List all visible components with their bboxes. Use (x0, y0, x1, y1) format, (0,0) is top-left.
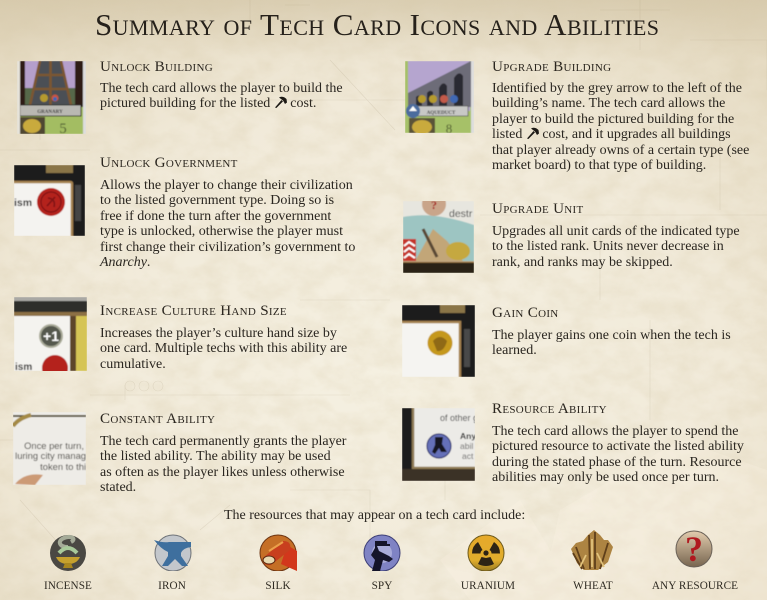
body text: during the stated phase of the turn. Resource (492, 455, 742, 470)
icon: granary card: GRANARY (37, 110, 63, 115)
body text: The player gains one coin when the tech is (492, 328, 731, 343)
body text: listed cost, and it upgrades all buildings (492, 127, 731, 142)
icon: unit card: destr (449, 208, 473, 220)
icon: resource ability card: abil (460, 441, 473, 451)
body text (492, 328, 731, 358)
heading: Unlock Government (100, 155, 238, 171)
icon: silk roll (260, 534, 297, 571)
heading: Upgrade Building (492, 59, 611, 75)
body text: market board) to that type of building. (492, 158, 706, 173)
title: Summary of Tech Card Icons and Abilities (95, 7, 659, 42)
icon: government card (14, 165, 85, 236)
resource: silk (260, 534, 297, 592)
body text: cumulative. (100, 357, 166, 372)
body text: The tech card allows the player to spend the (492, 424, 738, 439)
body text: the listed ability. The ability may be used (100, 449, 331, 464)
label: INCENSE (44, 580, 92, 592)
icon: any resource question mark (676, 530, 712, 568)
body text: learned. (492, 343, 537, 358)
panel: resource ability (402, 401, 744, 485)
resource: incense (44, 534, 92, 592)
body text: rank, and ranks may be skipped. (492, 255, 673, 270)
body text (99, 178, 355, 270)
icon: incense (50, 534, 86, 571)
body text (100, 434, 346, 495)
panel: constant ability (13, 411, 346, 495)
body text (492, 81, 749, 173)
panel: unlock government (14, 155, 355, 270)
heading: Upgrade Unit (492, 201, 584, 217)
label: IRON (158, 580, 186, 592)
body text: player to build the pictured building for the (492, 112, 734, 127)
icon: uranium (468, 534, 504, 571)
body text: The tech card permanently grants the player (100, 434, 346, 449)
body text: Identified by the grey arrow to the left of the (492, 81, 742, 96)
resource: spy (364, 534, 400, 592)
body text: building’s name. The tech card allows the (492, 96, 725, 111)
body text: type is unlocked, otherwise the player must (100, 224, 343, 239)
heading: Resource Ability (492, 401, 607, 417)
icon: coin card (402, 305, 475, 377)
body text: to the listed government type. Doing so is (100, 193, 334, 208)
label: ANY RESOURCE (652, 580, 738, 592)
icon: resource ability card (402, 408, 475, 481)
body text: pictured building for the listed cost. (100, 96, 316, 111)
heading: Increase Culture Hand Size (100, 303, 287, 319)
heading: Unlock Building (100, 59, 213, 75)
icon: culture card: +1 (43, 328, 59, 344)
body text (100, 326, 347, 372)
resource: iron (154, 534, 192, 592)
panel: upgrade building (405, 59, 749, 173)
icon: aqueduct card (405, 61, 474, 133)
panel: increase culture hand size (14, 297, 347, 372)
icon: constant ability card (13, 412, 86, 485)
icon: aqueduct card: AQUEDUCT (427, 111, 456, 116)
body text: Anarchy. (100, 255, 150, 270)
body text: to the listed rank. Units never decrease in (492, 239, 724, 254)
icon: iron anvil (154, 534, 192, 571)
label: SPY (372, 580, 392, 592)
label: URANIUM (461, 580, 515, 592)
icon: constant ability card: Once per turn, (24, 440, 84, 451)
body text: first change their civilization’s government to (100, 240, 355, 255)
body text: abilities may only be used once per turn. (492, 470, 719, 485)
panel: gain coin (402, 305, 731, 377)
body text (492, 224, 740, 270)
body text (492, 424, 744, 485)
body text: Increases the player’s culture hand size by (100, 326, 337, 341)
body text: one card. Multiple techs with this ability are (100, 341, 347, 356)
icon: culture card (14, 297, 87, 371)
label: WHEAT (573, 580, 613, 592)
icon: government card: ism (14, 197, 32, 209)
body text: pictured resource to activate the listed ability (492, 439, 744, 454)
icon: constant ability card: token to thi (40, 461, 86, 472)
resource: any resource (652, 530, 738, 592)
heading: Gain Coin (492, 305, 559, 321)
body text: The tech card allows the player to build the (100, 81, 343, 96)
panel: upgrade unit (403, 201, 740, 273)
icon: resource ability card: act (462, 451, 474, 461)
body text: stated. (100, 480, 136, 495)
text: resources intro: The resources that may appear on a tech card include: (224, 508, 525, 523)
body text: Allows the player to change their civilization (100, 178, 353, 193)
icon: unit card (403, 201, 474, 273)
body text: as often as the player likes unless otherwise (100, 465, 345, 480)
icon: wheat (571, 530, 613, 570)
icon: granary card (17, 61, 86, 134)
icon: spy (364, 534, 400, 571)
icon: constant ability card: luring city manag (15, 450, 86, 461)
body text (100, 81, 343, 111)
resource: uranium (461, 534, 515, 592)
body text: free if done the turn after the government (100, 209, 331, 224)
body text: that player already owns of a certain type (see (492, 143, 749, 158)
heading: Constant Ability (100, 411, 215, 427)
label: SILK (265, 580, 291, 592)
resource: wheat (571, 530, 613, 592)
panel: unlock building (17, 59, 343, 134)
body text: Upgrades all unit cards of the indicated type (492, 224, 740, 239)
